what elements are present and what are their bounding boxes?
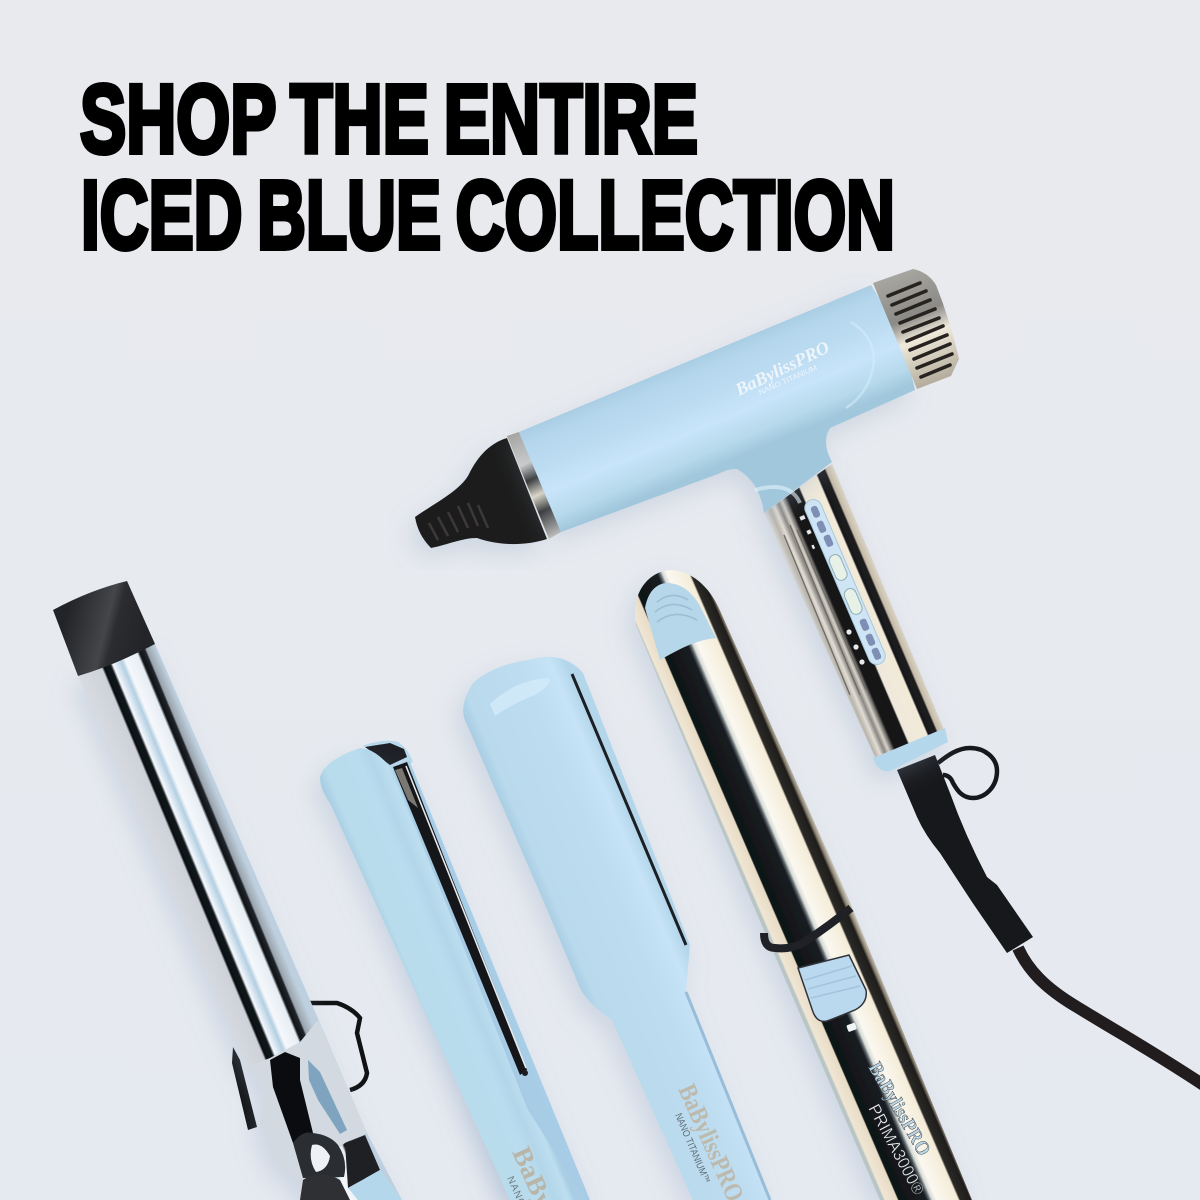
iron plate highlight: [406, 766, 526, 1068]
iron outer strip: [393, 760, 590, 1200]
curling iron clamp reflection: [270, 1052, 313, 1143]
chrome iron logo: PRIMA3000®: [864, 1101, 928, 1199]
wide iron logo: NANO TITANIUM™: [672, 1112, 712, 1185]
flat iron: slim blue: [320, 741, 590, 1200]
dryer control panel: [802, 497, 888, 667]
iron body: [320, 748, 586, 1200]
wide iron body: [463, 657, 770, 1200]
curling iron lever reflection: [308, 1060, 347, 1134]
chrome iron slider: [798, 955, 866, 1021]
chrome iron body: [635, 570, 972, 1200]
iron dot: [522, 1070, 528, 1076]
curling iron handle: [348, 1170, 402, 1200]
curling iron cool tip: [53, 581, 155, 676]
wide iron head highlight: [490, 678, 550, 716]
iron top plate edge: [362, 741, 413, 772]
chrome iron top button: [645, 583, 716, 660]
hair dryer: [415, 269, 1200, 1086]
wide iron edge: [686, 992, 770, 1200]
chrome iron logo: BaBylissPRO: [864, 1058, 935, 1160]
dryer nozzle: [415, 438, 547, 548]
curling iron handle band: [345, 1135, 380, 1188]
curling iron thumb rest: [232, 1047, 257, 1130]
dryer body: [519, 285, 915, 532]
flat iron: chrome Prima 3000: [635, 570, 972, 1200]
dryer cord: [897, 748, 1200, 1086]
title: [80, 64, 895, 270]
curling iron clamp chrome: [247, 1020, 367, 1180]
iron plate reflection: [395, 768, 418, 808]
curling iron chrome sphere: [293, 1132, 345, 1178]
chrome iron band: [764, 908, 851, 948]
dryer logo: BaBylissPRO: [731, 337, 832, 400]
flat iron: wide blue: [463, 657, 770, 1200]
curling iron rubber grip: [300, 1174, 350, 1200]
dryer collar: [873, 728, 948, 771]
dryer rear grill: [873, 269, 959, 389]
title: SHOP THE ENTIRE: [80, 64, 698, 174]
dryer handle: [764, 464, 948, 771]
curling iron barrel: [78, 644, 402, 1200]
dryer nozzle ribs: [429, 503, 488, 540]
dryer chrome ring: [507, 432, 561, 539]
curling iron: [53, 581, 402, 1200]
dryer control icons: [799, 515, 865, 665]
chrome iron power icon: [846, 1022, 857, 1032]
curling iron clip: [310, 1003, 367, 1090]
wide iron plate line: [572, 674, 686, 945]
dryer logo: NANO TITANIUM: [757, 363, 818, 397]
iron black plate: [393, 762, 527, 1075]
